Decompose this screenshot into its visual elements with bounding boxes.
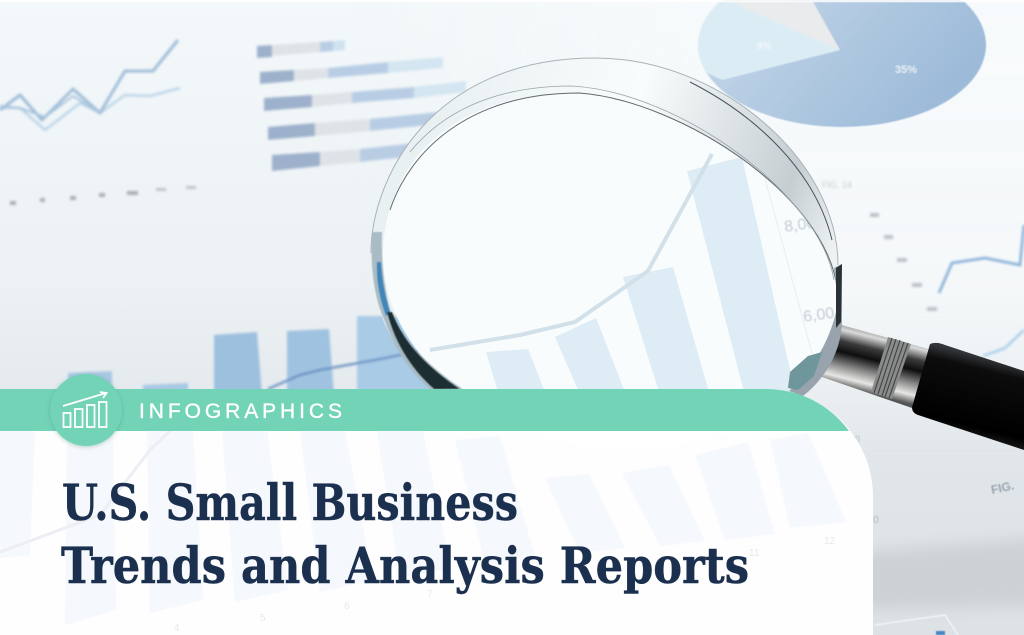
faint chart through panel: 7: [427, 589, 433, 600]
magnified chart inside lens: 8,00: [783, 215, 816, 236]
background labels: [850, 434, 1015, 526]
blue bars outside the lens: [68, 316, 445, 395]
lens edge lines: [371, 58, 838, 300]
line chart right: FIG. 14: [822, 180, 852, 190]
icon: growth chart badge: [50, 374, 122, 446]
pie chart: [698, 0, 986, 128]
title: U.S. Small Business: [62, 473, 518, 532]
line chart top left: [0, 40, 180, 130]
pie chart: 35%: [895, 64, 917, 76]
teal reflection near handle: [788, 352, 822, 390]
line chart right: [822, 180, 1024, 356]
small chart lower right: [875, 615, 958, 635]
axis labels top left chart: [10, 186, 196, 205]
faint chart through panel: 11: [749, 548, 760, 559]
background labels: 0: [873, 515, 879, 526]
faint chart through panel: 6: [344, 601, 350, 612]
title: [61, 473, 749, 595]
magnified chart inside lens: [430, 153, 834, 392]
white title panel: [0, 389, 873, 635]
faint chart through panel: 4: [174, 623, 180, 634]
magnified chart inside lens: 6,00: [802, 305, 835, 326]
lower right shadow band: [860, 538, 1024, 610]
faint chart through panel: 5: [260, 613, 266, 624]
title: Trends and Analysis Reports: [61, 536, 749, 595]
background labels: FIG.: [990, 478, 1015, 497]
handle ferrule: [822, 324, 932, 408]
faint chart through panel: [0, 431, 846, 634]
background labels: 90: [850, 434, 860, 444]
lens rim: [371, 58, 838, 345]
stacked bar chart: [257, 40, 466, 171]
lens glass: [383, 93, 838, 450]
magnifying glass: [371, 58, 1024, 450]
metal ring near handle: [789, 264, 842, 396]
pie chart: 9%: [757, 41, 772, 52]
label: INFOGRAPHICS: INFOGRAPHICS: [139, 400, 342, 423]
faint chart through panel: 12: [824, 536, 836, 547]
black handle: [912, 343, 1024, 450]
dark reflection at lower left of lens: [372, 232, 463, 389]
green band: [0, 389, 849, 431]
